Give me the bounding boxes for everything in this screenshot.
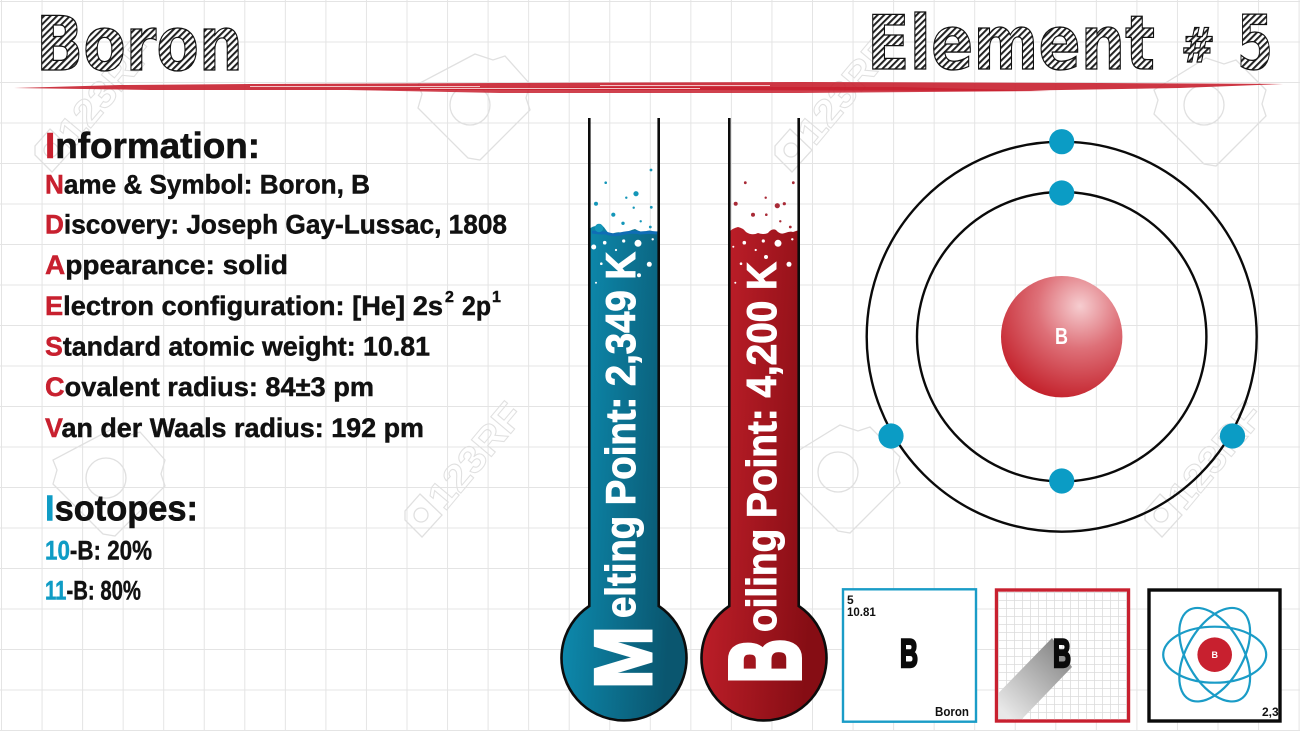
card frame [843, 589, 976, 722]
electron configuration: 1 [492, 289, 501, 306]
long shadow [998, 638, 1072, 719]
atomic number: 5 [847, 593, 854, 607]
name and symbol: Name & Symbol: Boron, B [45, 170, 370, 200]
title: Element # 5: 5 [1237, 0, 1273, 87]
panel: periodic table card [843, 589, 976, 722]
bubbles above liquid [734, 181, 795, 228]
bubbles in liquid [591, 238, 654, 284]
watermarks: 123RF [1160, 395, 1272, 518]
tube outline [702, 118, 827, 720]
liquid [562, 225, 687, 720]
watermarks: 123RF [50, 30, 162, 153]
card frame [1149, 590, 1280, 721]
discovery: Discovery: Joseph Gay-Lussac, 1808 [45, 210, 507, 240]
heading: Information: Information: [45, 125, 260, 166]
big letter B: B [710, 639, 822, 683]
heading: Isotopes: Isotopes: [45, 488, 198, 528]
atomic weight: 10.81 [847, 607, 876, 619]
covalent radius: Covalent radius: 84±3 pm [45, 372, 374, 402]
symbol: B [1053, 632, 1071, 676]
isotope 11-B: 11-B: 80% [45, 576, 141, 606]
bubbles above liquid [594, 169, 653, 232]
tube outline [562, 118, 687, 720]
panel: information [45, 125, 507, 443]
atom diagram [867, 129, 1257, 532]
title: Element # 5: Element [867, 0, 1155, 87]
liquid surface [592, 232, 657, 235]
fine grid [998, 592, 1127, 719]
watermarks: 123RF [420, 395, 532, 518]
electrons [878, 129, 1245, 494]
watermarks [35, 30, 1272, 537]
element name: Boron [935, 704, 969, 719]
nucleus [1001, 276, 1122, 397]
nucleus symbol: B [1211, 650, 1218, 660]
watermarks: 123RF [790, 30, 902, 153]
title: Boron: Boron [36, 0, 243, 88]
thermometer: melting point [562, 118, 687, 720]
standard atomic weight: Standard atomic weight: 10.81 [45, 332, 430, 362]
electron configuration: Electron configuration: [He] 2s [45, 291, 443, 321]
appearance: Appearance: solid [45, 250, 288, 280]
orbit ellipses [1163, 596, 1266, 713]
electron configuration: 2p [462, 291, 491, 321]
isotope 10-B: 10-B: 20% [45, 536, 152, 566]
thermometer: boiling point [702, 118, 827, 720]
bubbles in liquid [732, 238, 794, 284]
red brush divider [14, 82, 1283, 93]
nucleus [1197, 637, 1232, 672]
electron shells: 2,3 [1262, 705, 1279, 719]
panel: long shadow card [996, 590, 1128, 721]
electron configuration: 2 [445, 289, 454, 306]
panel: isotopes [45, 488, 198, 606]
orbits [867, 142, 1257, 532]
melting point label: elting Point: 2,349 K [597, 252, 644, 618]
nucleus symbol: B [1055, 323, 1068, 349]
panel: atom icon card [1149, 590, 1280, 721]
liquid [702, 227, 827, 720]
card frame [996, 590, 1128, 721]
title: Element # 5: # [1181, 18, 1215, 74]
symbol: B [900, 632, 918, 676]
van der waals radius: Van der Waals radius: 192 pm [45, 413, 424, 443]
boiling point label: oiling Point: 4,200 K [738, 262, 785, 632]
big letter M: M [579, 626, 669, 689]
